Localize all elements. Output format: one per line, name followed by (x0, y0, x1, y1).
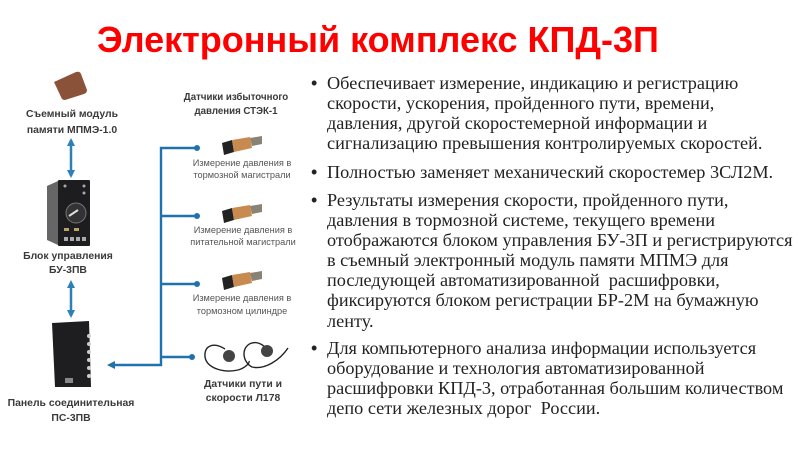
bullet 2: • (311, 162, 317, 182)
text: sensor 1: тормозной магистрали (193, 170, 291, 180)
bullet 1: • (311, 73, 317, 93)
heading: pressure sensors: давления СТЭК-1 (194, 106, 278, 117)
arrow: module to control unit (70, 140, 72, 176)
label: connection panel: ПС-3ПВ (51, 413, 91, 424)
label: connection panel: Панель соединительная (8, 398, 134, 409)
text: sensor 3: Измерение давления в (193, 293, 291, 303)
label: control unit: БУ-3ПВ (49, 265, 87, 276)
paragraph 1: Обеспечивает измерение, индикацию и регистрацию (327, 73, 738, 93)
icon: path and speed sensors (205, 343, 288, 371)
heading: pressure sensors: Датчики избыточного (184, 92, 288, 103)
text: sensor 2: питательной магистрали (190, 237, 296, 247)
label: path and speed sensors: Датчики пути и (204, 379, 282, 390)
bullet 3: • (311, 190, 317, 210)
icon: memory module (54, 72, 87, 100)
paragraph 4: расшифровки КПД-3, отработанная большим количеством (327, 378, 783, 398)
label: memory module: памяти МПМЭ-1.0 (27, 125, 117, 136)
label: control unit: Блок управления (23, 251, 113, 262)
icon: pressure sensor 1 (222, 136, 262, 155)
arrowheads: module to control unit (67, 138, 75, 178)
paragraph 4 (327, 338, 783, 418)
paragraph 1: скорости, ускорения, пройденного пути, времени, (327, 93, 714, 113)
paragraph 4: оборудование и технология автоматизированной (327, 358, 705, 378)
paragraph 3: фиксируются блоком регистрации БР-2М на бумажную (327, 290, 758, 310)
title: Электронный комплекс КПД-3П (97, 19, 659, 60)
paragraph 3: ленту. (327, 311, 374, 331)
text: sensor 1: Измерение давления в (193, 158, 291, 168)
paragraph 3: отображаются блоком управления БУ-3П и регистрируются (327, 230, 792, 250)
paragraph 3: последующей автоматизированной расшифровки, (327, 270, 720, 290)
text: sensor 3: тормозном цилиндре (197, 306, 287, 316)
paragraph 4: депо сети железных дорог России. (327, 398, 600, 418)
icon: connection panel (52, 321, 91, 387)
label: path and speed sensors: скорости Л178 (206, 393, 280, 404)
icon: pressure sensor 3 (222, 271, 262, 290)
connector lines (110, 148, 197, 365)
icon: pressure sensor 2 (222, 204, 262, 223)
arrowheads: control unit to panel (67, 280, 75, 318)
icon: control unit (47, 180, 90, 246)
paragraph 1: сигнализацию превышения контролируемых скоростей. (327, 133, 762, 153)
paragraph 2: Полностью заменяет механический скоростемер 3СЛ2М. (327, 162, 773, 182)
text: sensor 2: Измерение давления в (194, 225, 292, 235)
label: memory module: Съемный модуль (26, 109, 118, 120)
paragraph 4: Для компьютерного анализа информации используется (327, 338, 756, 358)
arrow: control unit to panel (70, 283, 72, 316)
diagram: KPD-3P components (8, 72, 296, 424)
connector arrowheads and dots (107, 145, 200, 369)
paragraph 3 (327, 190, 792, 331)
paragraph 3: Результаты измерения скорости, пройденного пути, (327, 190, 728, 210)
paragraph 1 (327, 73, 762, 153)
paragraph 1: давления, другой скоростемерной информации и (327, 113, 707, 133)
bullet 4: • (311, 338, 317, 358)
paragraph 3: давления в тормозной системе, текущего времени (327, 210, 715, 230)
paragraph 3: в съемный электронный модуль памяти МПМЭ для (327, 250, 729, 270)
